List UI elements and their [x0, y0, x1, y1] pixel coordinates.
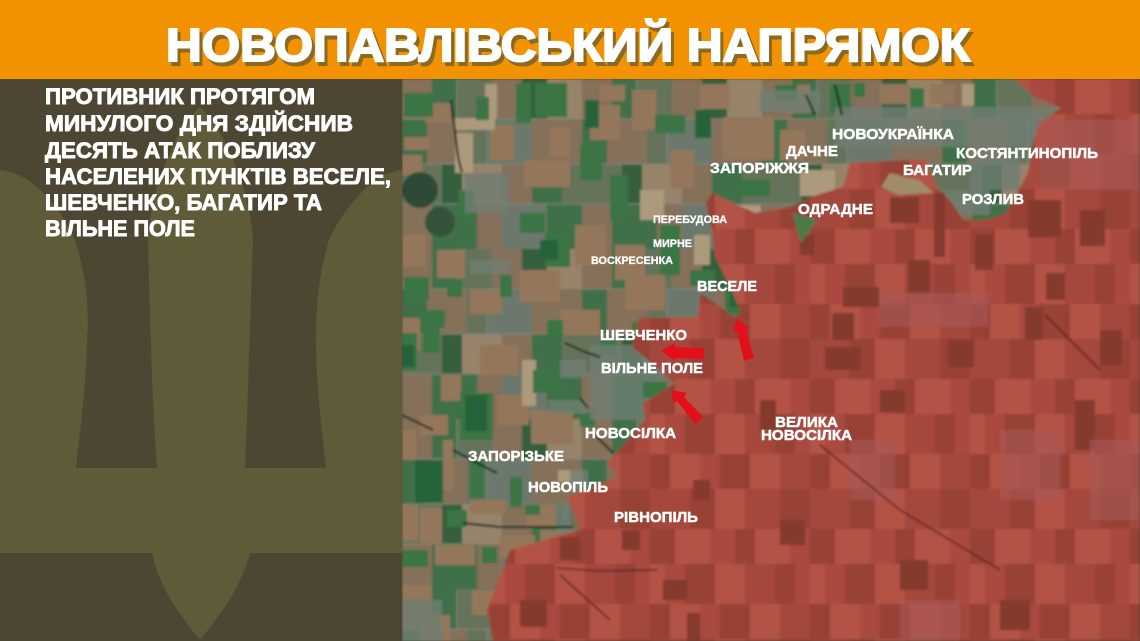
- label: Костянтинопіль: КОСТЯНТИНОПІЛЬ: [956, 145, 1098, 162]
- label: Дачне: ДАЧНЕ: [786, 143, 838, 160]
- label: Запорізьке: ЗАПОРІЗЬКЕ: [468, 448, 564, 465]
- label: Новоукраїнка: НОВОУКРАЇНКА: [832, 126, 954, 143]
- icon: trident emblem: [0, 107, 402, 640]
- label: Велика Новосілка: НОВОСІЛКА: [761, 427, 852, 444]
- body text: ДЕСЯТЬ АТАК ПОБЛИЗУ: [45, 138, 315, 163]
- arrow: towards Vilne Pole: [672, 390, 703, 424]
- body text: ВІЛЬНЕ ПОЛЕ: [45, 216, 195, 241]
- body text: НАСЕЛЕНИХ ПУНКТІВ ВЕСЕЛЕ,: [45, 164, 391, 189]
- arrow: towards Vesele: [733, 319, 754, 361]
- label: Новопіль: НОВОПІЛЬ: [528, 479, 608, 496]
- label: Мирне: МИРНЕ: [653, 238, 692, 250]
- label: Велика Новосілка: ВЕЛИКА: [775, 414, 838, 431]
- label: Запоріжжя: ЗАПОРІЖЖЯ: [710, 160, 809, 177]
- body text: МИНУЛОГО ДНЯ ЗДІЙСНИВ: [45, 111, 353, 136]
- label: Одрадне: ОДРАДНЕ: [798, 201, 873, 218]
- label: Рівнопіль: РІВНОПІЛЬ: [614, 509, 698, 526]
- label: Багатир: БАГАТИР: [903, 162, 972, 179]
- title: НОВОПАВЛІВСЬКИЙ НАПРЯМОК: [166, 19, 971, 71]
- satellite map: [402, 79, 1140, 641]
- label: Воскресенка: ВОСКРЕСЕНКА: [591, 255, 673, 267]
- body text: ПРОТИВНИК ПРОТЯГОМ: [45, 84, 315, 109]
- territory overlay: occupied area: [487, 79, 1140, 641]
- left panel with trident emblem: [0, 79, 402, 641]
- map labels: [468, 126, 1098, 526]
- arrow: towards Shevchenko: [661, 343, 704, 361]
- label: Веселе: ВЕСЕЛЕ: [697, 278, 757, 295]
- field patches inside the occupied area: [520, 193, 1122, 641]
- label: Шевченко: ШЕВЧЕНКО: [600, 327, 687, 344]
- body text: [45, 84, 391, 241]
- title bar: [0, 0, 1140, 79]
- label: Перебудова: ПЕРЕБУДОВА: [653, 214, 727, 226]
- body text: ШЕВЧЕНКО, БАГАТИР ТА: [45, 190, 322, 215]
- label: Новосілка: НОВОСІЛКА: [585, 425, 676, 442]
- label: Велика Новосілка: [761, 414, 852, 444]
- label: Вільне Поле: ВІЛЬНЕ ПОЛЕ: [601, 360, 703, 377]
- unoccupied wedge near Odradne: [792, 213, 817, 243]
- unoccupied fields near Bagatyr: [881, 173, 934, 195]
- label: Розлив: РОЗЛИВ: [962, 191, 1024, 208]
